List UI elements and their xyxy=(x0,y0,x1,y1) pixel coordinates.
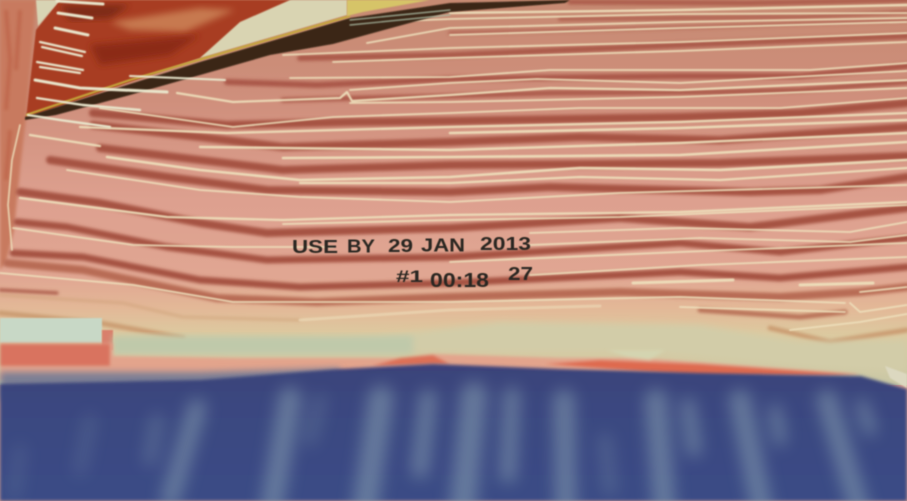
blue cloth xyxy=(0,364,907,501)
meat slices base xyxy=(0,0,907,385)
red printed wrapper folded back xyxy=(25,0,570,120)
lower tan folds xyxy=(0,295,907,342)
use by date: USE xyxy=(292,236,338,257)
right corner highlight xyxy=(885,366,907,388)
use by date: JAN xyxy=(421,234,465,256)
red tray rim xyxy=(0,343,860,380)
ribbed film ends at top left xyxy=(28,1,450,127)
printed date code xyxy=(292,233,533,292)
dark slice edge bands xyxy=(0,0,907,317)
use by date xyxy=(292,233,531,257)
blue cloth light streaks xyxy=(14,395,870,501)
left tray edge xyxy=(0,0,36,270)
line code: 27 xyxy=(508,264,533,284)
label on tray xyxy=(0,318,413,354)
use by date: BY xyxy=(347,236,376,256)
blurred left edge xyxy=(0,368,340,400)
dark shadow wedge xyxy=(25,0,570,120)
pale film band above the blue cloth xyxy=(115,322,907,372)
yellow wrapper edge xyxy=(26,16,350,115)
time code: 00:18 xyxy=(430,270,489,292)
wrapper underside xyxy=(200,0,347,58)
use by date: 2013 xyxy=(480,233,531,254)
glossy cream film highlights xyxy=(0,5,907,330)
use by date: 29 xyxy=(388,235,413,256)
batch number: #1 xyxy=(396,267,423,286)
